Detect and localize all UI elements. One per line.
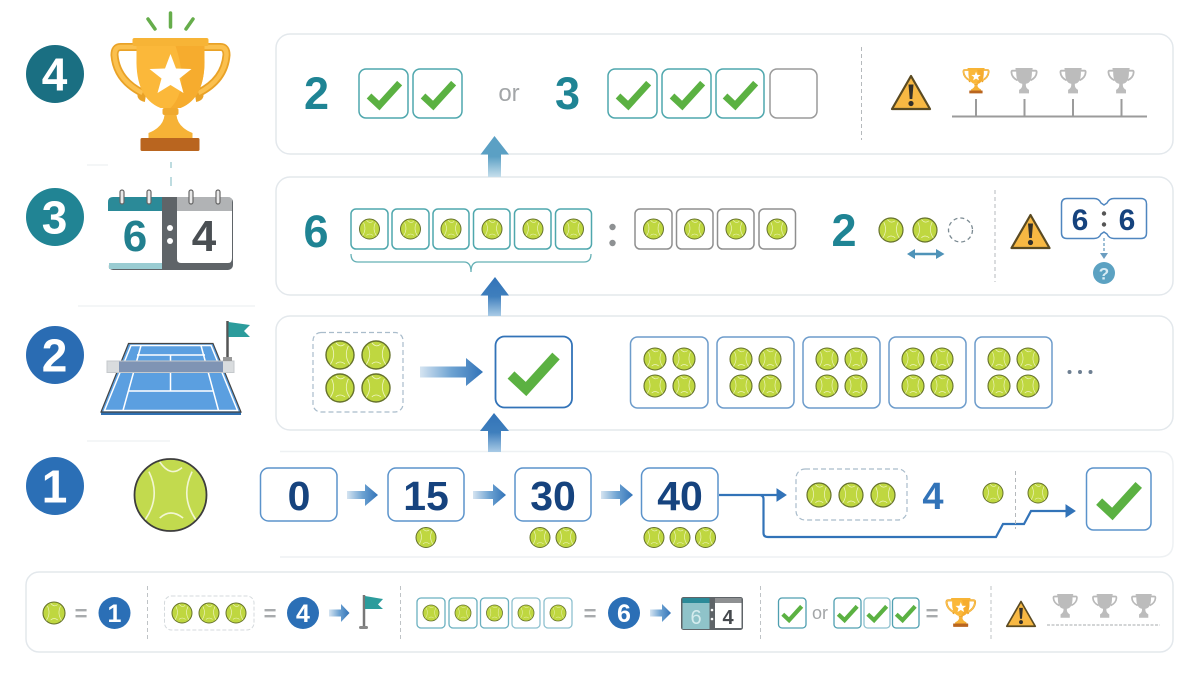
arrow: level 3 to 4 (480, 136, 509, 177)
legend: six games equals set: = (584, 601, 596, 626)
number 2: 2 (304, 68, 329, 119)
tiebreak score 6 6: 6 (1119, 204, 1135, 237)
badge 4 (26, 45, 84, 103)
number 6: 6 (303, 206, 329, 257)
badge 1 (26, 457, 84, 515)
arrow: level 1 to 2 (480, 413, 509, 452)
arrow (420, 358, 483, 386)
score 15: 15 (403, 473, 449, 519)
question badge (1093, 262, 1115, 284)
panel: level 2 game (276, 316, 1173, 430)
number 4: 4 (922, 476, 944, 518)
three points group (796, 469, 907, 520)
four games lost (635, 209, 796, 249)
number 3: 3 (555, 68, 580, 119)
legend: ball equals 1 (43, 597, 130, 629)
score 40: 40 (657, 473, 703, 519)
tiebreak score 6 6: 6 (1072, 204, 1088, 237)
badge 1: 1 (42, 460, 67, 512)
icon: tennis ball (134, 459, 206, 531)
score 30: 30 (530, 473, 576, 519)
badge 3: 3 (42, 192, 67, 244)
panel: level 1 point (260, 452, 1173, 557)
score 0: 0 (288, 473, 310, 519)
number 2: 2 (831, 205, 857, 256)
badge 2 (26, 326, 84, 384)
games row (630, 337, 1052, 408)
icon: set score calendar: 6 (123, 212, 147, 261)
two checked sets (359, 69, 462, 118)
two game lead (879, 218, 972, 259)
trophy timeline (952, 68, 1147, 116)
legend: four points equals game: = (264, 601, 276, 626)
check box (1086, 468, 1151, 530)
check box (496, 336, 572, 408)
score 0 (260, 468, 337, 521)
legend: warning and grey trophies (1007, 594, 1160, 626)
legend: ball equals 1: = (75, 601, 87, 626)
legend: two or three sets equals trophy (778, 598, 975, 628)
legend panel (26, 572, 1173, 652)
icon: tennis court with flag (101, 321, 250, 415)
legend: six games equals set: 6 (617, 600, 631, 628)
three checked sets and one empty (608, 69, 817, 118)
legend: ball equals 1: 1 (108, 600, 122, 628)
icon: set score calendar: 4 (192, 212, 217, 261)
badge 3 (26, 188, 84, 246)
tiebreak score 6 6 (1062, 198, 1146, 259)
legend: six games equals set: 6 (690, 607, 702, 629)
question badge: ? (1099, 264, 1109, 284)
arrow: level 2 to 3 (480, 277, 509, 316)
panel: level 3 set (276, 177, 1173, 295)
legend: four points equals game: 4 (296, 600, 310, 628)
badge 2: 2 (42, 330, 67, 382)
icon: warning (892, 76, 930, 109)
or: or (498, 80, 520, 107)
badge 4: 4 (42, 48, 68, 100)
score 15 (388, 468, 464, 548)
score 30 (515, 468, 591, 548)
ellipsis dots (1068, 370, 1092, 374)
branch arrows (719, 489, 1075, 537)
panel: level 4 match win (276, 34, 1173, 154)
legend: six games equals set (417, 597, 743, 630)
colon (609, 224, 616, 246)
arrow (601, 484, 633, 506)
legend: two or three sets equals trophy: = (926, 601, 938, 626)
legend: two or three sets equals trophy: or (812, 603, 828, 623)
ball (1028, 483, 1048, 503)
ball (983, 483, 1003, 503)
arrow (347, 484, 378, 506)
six games won (351, 209, 592, 249)
score 40 (642, 468, 718, 548)
four points group (313, 332, 403, 412)
arrow (473, 484, 506, 506)
icon: set score calendar (108, 190, 233, 270)
legend: six games equals set: 4 (722, 607, 734, 629)
brace under six games (351, 254, 591, 272)
icon: warning (1012, 215, 1050, 248)
legend: four points equals game (164, 595, 383, 630)
icon: trophy with rays (114, 13, 226, 151)
